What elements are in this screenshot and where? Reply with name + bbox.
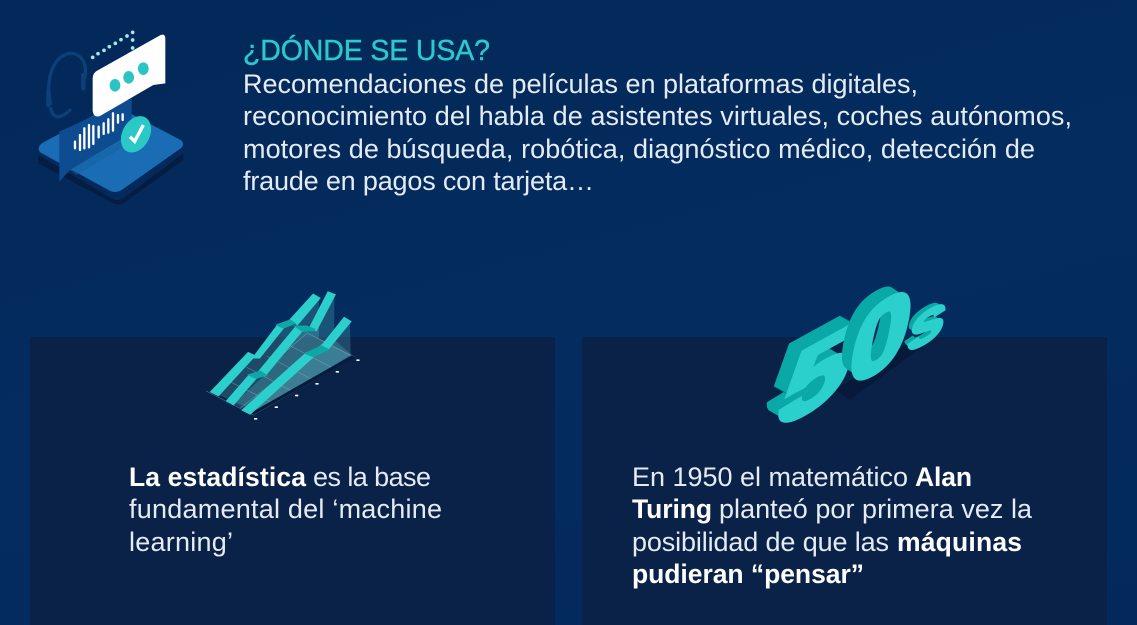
text block: statistics: fundamental del ‘machine — [129, 494, 442, 524]
text block: Alan Turing: planteó por primera vez la — [719, 494, 1033, 524]
shadow of 50s — [835, 345, 925, 400]
icon: check badge — [115, 111, 157, 158]
chart: front ribbon — [243, 318, 350, 413]
text block: Alan Turing — [632, 462, 1033, 589]
text block: statistics: learning’ — [129, 527, 233, 557]
chart: axis ticks — [254, 359, 360, 420]
text block: uses: reconocimiento del habla de asistentes virtuales, coches autónomos, — [243, 101, 1072, 131]
text block: statistics: es la base — [313, 462, 431, 492]
text block: Alan Turing: pudieran “pensar” — [632, 559, 864, 589]
text block: Alan Turing: Turing — [632, 494, 712, 524]
icon: chat dots — [110, 62, 149, 92]
text block: Alan Turing: Alan — [915, 462, 972, 492]
icon: sound wave — [75, 113, 123, 150]
illustration: 3D 50s: 0 — [840, 262, 922, 412]
chart: back ribbon — [212, 295, 319, 395]
text block: uses: fraude en pagos con tarjeta… — [243, 166, 594, 196]
illustration: 3D 50s — [765, 262, 954, 454]
panel: statistics — [30, 337, 555, 625]
text block: Alan Turing: posibilidad de que las — [632, 527, 889, 557]
text block: Alan Turing: En 1950 el matemático — [632, 462, 908, 492]
chart: isometric ribbons — [206, 293, 360, 420]
icon: dotted line — [91, 30, 134, 59]
icon: chat bubble — [93, 35, 165, 117]
text block: uses: Recomendaciones de películas en plataformas digitales, — [243, 69, 918, 99]
text block: uses — [243, 69, 1072, 196]
chart: translucent walls — [218, 295, 353, 414]
text block: statistics — [129, 462, 442, 557]
icon: headset — [48, 53, 85, 117]
text block: uses: motores de búsqueda, robótica, diagnóstico médico, detección de — [243, 134, 1035, 164]
chart: middle ribbon — [228, 293, 334, 404]
text block: Alan Turing: máquinas — [897, 527, 1022, 557]
text block: statistics: La estadística — [129, 462, 306, 492]
icon: voice bubble — [59, 98, 132, 182]
illustration: 3D 50s: 5 — [765, 295, 870, 454]
panel: 1950s — [582, 337, 1107, 625]
illustration: 3D 50s: s — [902, 275, 954, 368]
title: ¿DÓNDE SE USA? — [243, 35, 490, 67]
chart: grid — [206, 333, 355, 415]
icon: virtual assistant platform — [38, 30, 183, 204]
icon: platform top — [39, 106, 183, 192]
